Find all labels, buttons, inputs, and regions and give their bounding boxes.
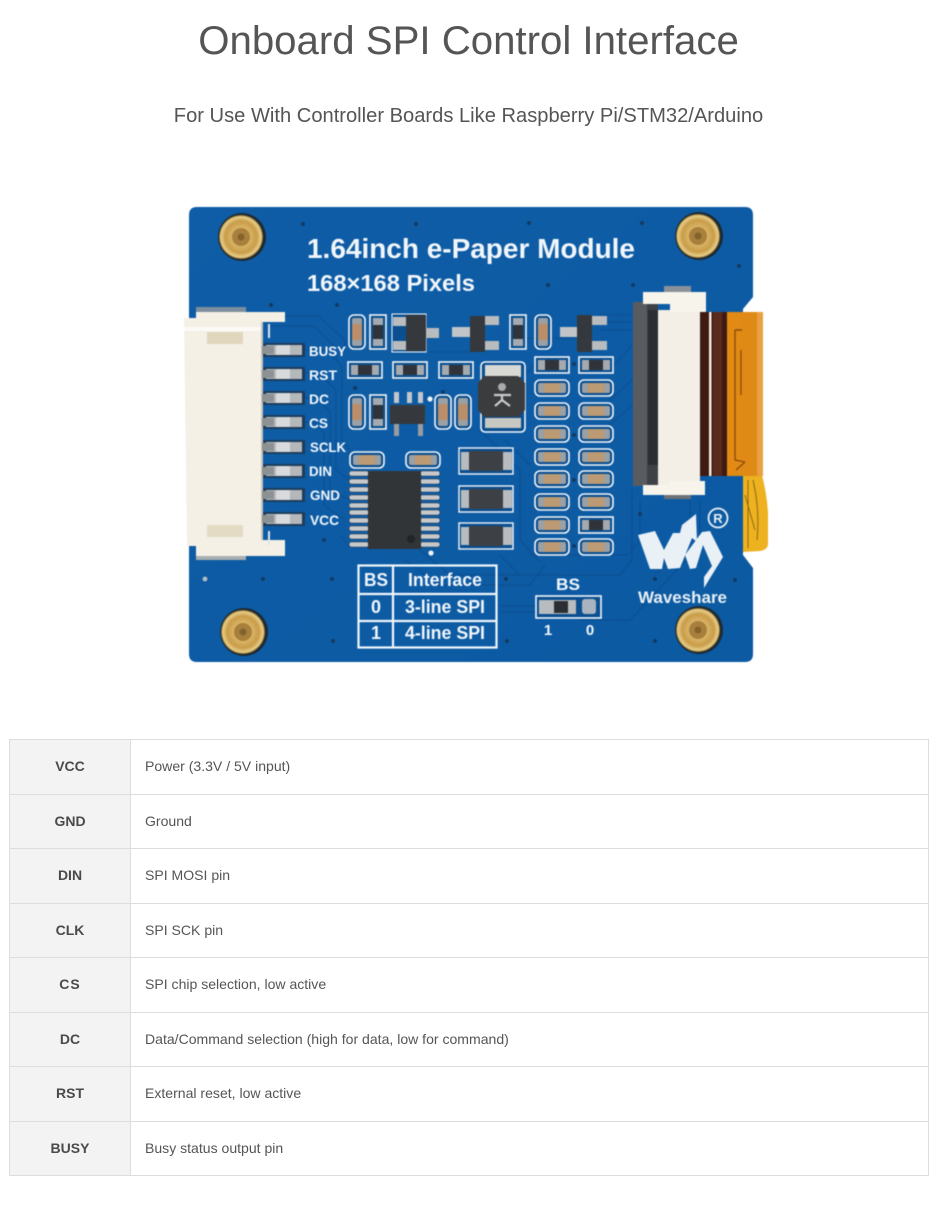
row: DC: [9, 1013, 929, 1067]
mounting nuts: [218, 212, 723, 656]
row: CS: [9, 958, 929, 1013]
row: RST: External reset, low active: [145, 1085, 301, 1101]
row: CLK: CLK: [56, 922, 84, 938]
row: CLK: [9, 904, 929, 958]
row: RST: [9, 1067, 929, 1122]
board silkscreen title: 1.64inch e-Paper Module: [307, 233, 635, 264]
pin labels: BUSY: [309, 343, 347, 359]
small caps above IC: [350, 452, 440, 468]
pin labels: GND: [310, 487, 340, 503]
board silkscreen title: [307, 233, 635, 296]
row: RST: RST: [56, 1085, 84, 1101]
ribbon cable: [700, 312, 763, 476]
second row resistors: [348, 362, 473, 378]
transistors beside IC: [459, 448, 513, 549]
white pin header connector: [184, 307, 285, 560]
row: DIN: DIN: [58, 867, 82, 883]
row: GND: GND: [54, 813, 86, 829]
row: GND: Ground: [145, 813, 192, 829]
yellow flex cable fold: [743, 475, 768, 552]
pin labels: CS: [309, 415, 328, 431]
BS interface table: 1: [371, 623, 381, 643]
top row components: [349, 314, 607, 352]
e-Paper driver board photo illustration: [184, 206, 769, 663]
Waveshare logo: Waveshare: [638, 589, 727, 607]
row: DIN: SPI MOSI pin: [145, 867, 230, 883]
capacitor and resistor grid: [535, 357, 613, 555]
pin labels: VCC: [310, 512, 339, 528]
board silkscreen title: 168×168 Pixels: [307, 270, 475, 296]
row: BUSY: [9, 1122, 929, 1176]
subtitle: For Use With Controller Boards Like Raspberry Pi/STM32/Arduino: [174, 105, 763, 127]
row: GND: [9, 795, 929, 849]
row: CS: SPI chip selection, low active: [145, 976, 326, 992]
row: DIN: [9, 849, 929, 904]
BS interface table: 0: [371, 597, 381, 617]
pin labels: DIN: [309, 463, 332, 479]
pin labels: DC: [309, 391, 329, 407]
pin labels: SCLK: [310, 439, 346, 455]
row: CS: CS: [59, 976, 81, 992]
title: Onboard SPI Control Interface: [198, 18, 739, 63]
Waveshare logo: R: [713, 511, 723, 526]
Waveshare logo: [638, 508, 728, 607]
row: DC: Data/Command selection (high for data, low for command): [145, 1031, 509, 1047]
row: VCC: VCC: [55, 758, 85, 774]
row: VCC: [9, 740, 929, 795]
pin description table: [9, 739, 929, 1176]
third row components: [349, 392, 471, 436]
BS solder jumper: 0: [586, 622, 594, 639]
row: BUSY: BUSY: [51, 1140, 89, 1156]
row: VCC: Power (3.3V / 5V input): [145, 758, 290, 774]
row: CLK: SPI SCK pin: [145, 922, 223, 938]
pin labels: [309, 343, 347, 528]
via holes: [261, 221, 741, 643]
BS interface table: 4-line SPI: [405, 623, 485, 643]
row: BUSY: Busy status output pin: [145, 1140, 283, 1156]
BS interface table: 3-line SPI: [405, 597, 485, 617]
connector pin pads: [262, 343, 305, 526]
power inductor: [478, 362, 525, 432]
pin labels: RST: [309, 367, 337, 383]
BS solder jumper: 1: [544, 622, 552, 639]
pcb outline: [189, 207, 753, 662]
driver IC: [349, 471, 440, 549]
BS solder jumper: BS: [556, 575, 580, 594]
FPC connector: [633, 286, 706, 499]
BS solder jumper: [536, 575, 601, 639]
BS interface table: [358, 565, 497, 648]
row: DC: DC: [60, 1031, 80, 1047]
copper traces: [270, 315, 700, 620]
BS interface table: Interface: [408, 570, 482, 590]
BS interface table: BS: [364, 570, 388, 590]
